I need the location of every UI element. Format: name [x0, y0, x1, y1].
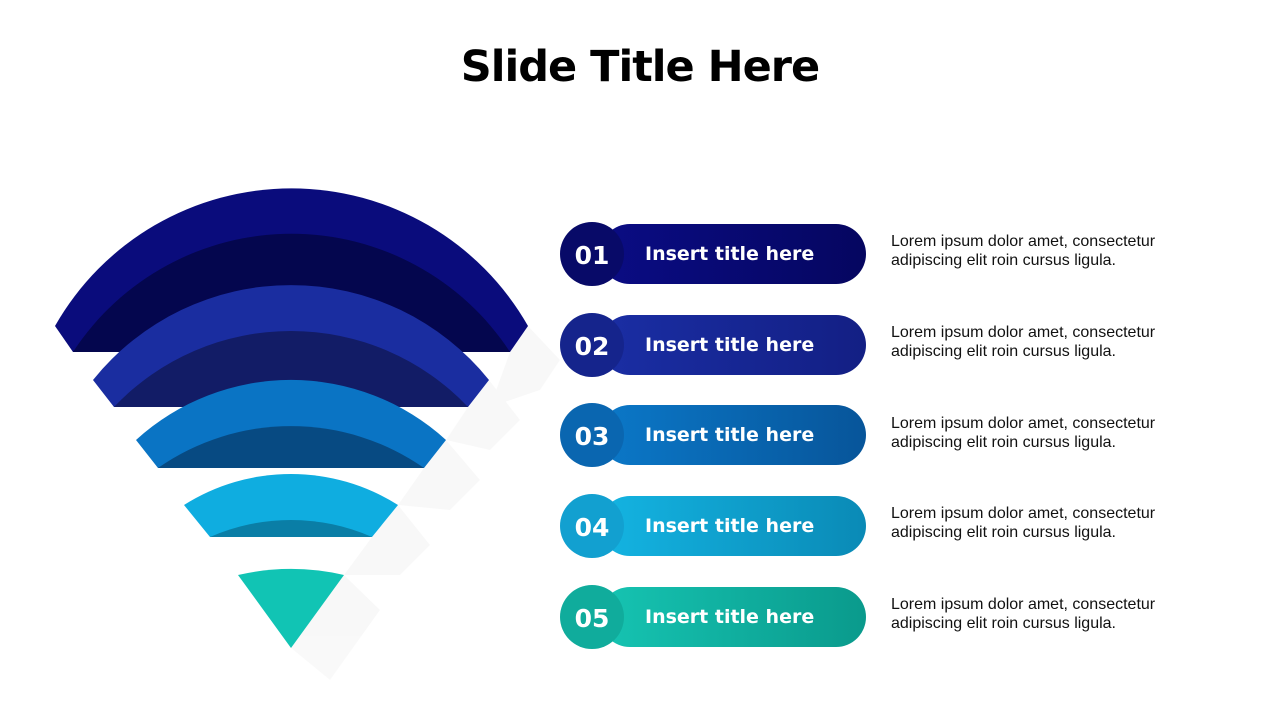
item 01: 01 [575, 241, 609, 270]
item 04 [560, 494, 866, 558]
band 3 [136, 380, 446, 468]
item 03 [560, 403, 866, 467]
desc 01: Lorem ipsum dolor amet, consectetur adipiscing elit roin cursus ligula. [891, 233, 1155, 269]
item 05: 05 [575, 604, 609, 633]
item 02: Insert title here [645, 334, 814, 356]
item 05: Insert title here [645, 606, 814, 628]
desc 05: Lorem ipsum dolor amet, consectetur adipiscing elit roin cursus ligula. [891, 596, 1155, 632]
item 01 [560, 222, 866, 286]
band 2 [93, 285, 489, 407]
item 04: Insert title here [645, 515, 814, 537]
desc 04: Lorem ipsum dolor amet, consectetur adipiscing elit roin cursus ligula. [891, 505, 1155, 541]
band 4 [184, 474, 398, 537]
wifi chart [55, 188, 528, 648]
band 5 teal [238, 569, 344, 648]
item 01: Insert title here [645, 243, 814, 265]
band 1 [55, 188, 528, 352]
title: Slide Title Here [461, 42, 819, 92]
item 02: 02 [575, 332, 609, 361]
shadows [291, 326, 560, 680]
item 03: 03 [575, 422, 609, 451]
item 02 [560, 313, 866, 377]
item 05 [560, 585, 866, 649]
desc 03: Lorem ipsum dolor amet, consectetur adipiscing elit roin cursus ligula. [891, 415, 1155, 451]
item 04: 04 [575, 513, 609, 542]
item 03: Insert title here [645, 424, 814, 446]
desc 02: Lorem ipsum dolor amet, consectetur adipiscing elit roin cursus ligula. [891, 324, 1155, 360]
